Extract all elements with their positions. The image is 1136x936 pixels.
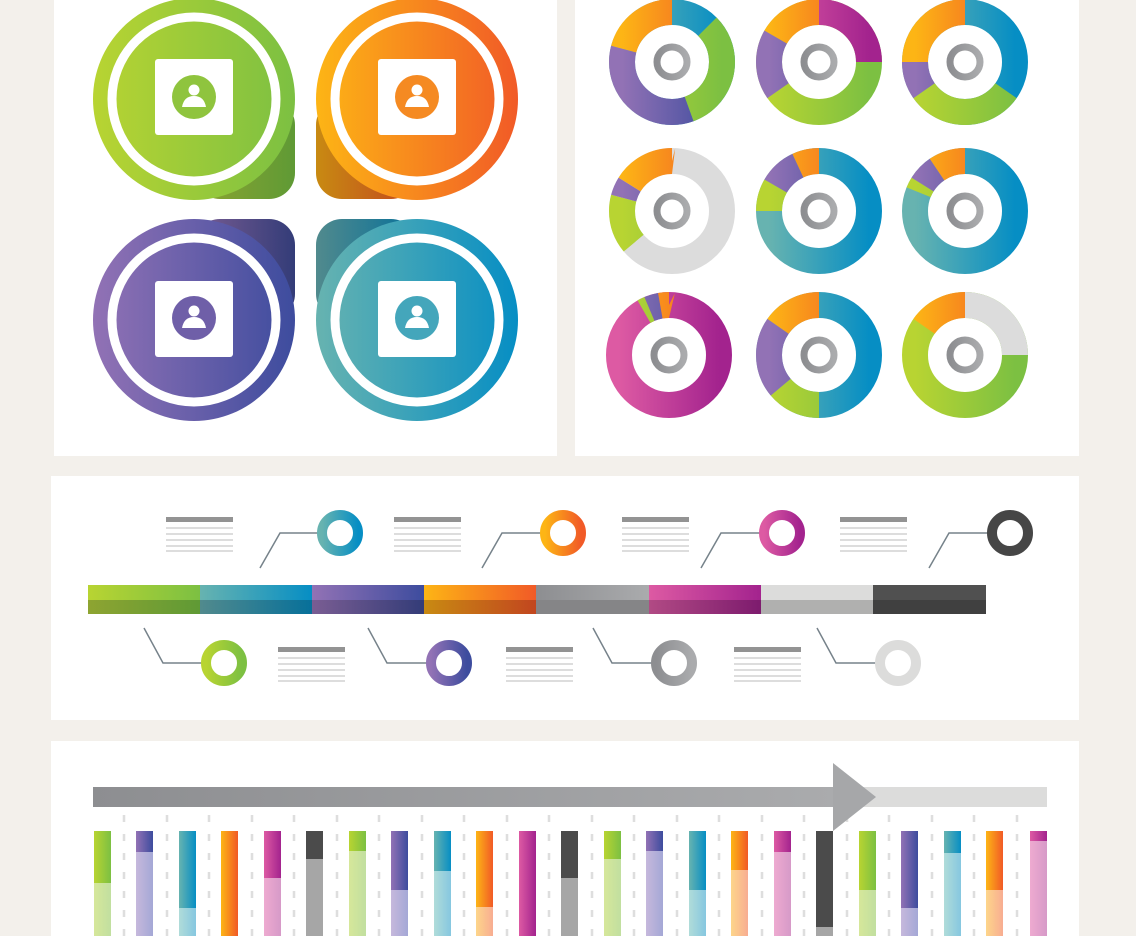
donut chart 3 [915, 12, 1015, 112]
donut chart 7 [619, 305, 719, 405]
donut chart 1 [622, 12, 722, 112]
panel: progress bars [51, 741, 1079, 936]
placeholder text blocks [166, 517, 907, 682]
dashed separators [124, 815, 1017, 936]
vertical bars [94, 831, 1047, 936]
donut chart 6 [915, 161, 1015, 261]
icon: orange profile badge [316, 0, 518, 200]
panel: donut charts [575, 0, 1079, 456]
connector lines [144, 533, 988, 663]
milestone rings [206, 515, 1028, 681]
donut chart 2 [769, 12, 869, 112]
progress arrow [93, 763, 1047, 831]
icon: green profile badge [93, 0, 295, 200]
donut chart 9 [915, 305, 1015, 405]
panel: icons [54, 0, 557, 456]
icon: purple profile badge [93, 219, 295, 421]
donut chart 5 [769, 161, 869, 261]
timeline bar [88, 585, 986, 614]
panel: timeline [51, 476, 1079, 720]
icon: teal profile badge [316, 219, 518, 421]
donut chart 8 [769, 305, 869, 405]
donut chart 4 [622, 161, 722, 261]
